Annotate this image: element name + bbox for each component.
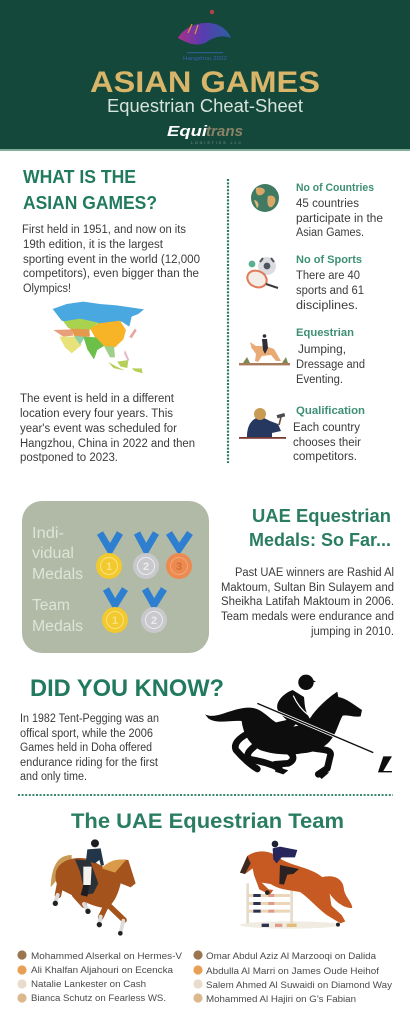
- label: team medals: Medals: [32, 618, 83, 635]
- panel: medals: [22, 501, 209, 653]
- fact: equestrian: Dressage and: [296, 359, 365, 371]
- text block: location: year's event was scheduled for: [20, 423, 177, 435]
- label: individual medals: vidual: [32, 545, 74, 562]
- legend: rider list, left: [17, 950, 183, 1004]
- text block: tent pegging: and only time.: [20, 771, 87, 783]
- text block: intro: Olympics!: [23, 283, 71, 295]
- rider: Omar Abdul Aziz Al Marzooqi: Omar Abdul Aziz Al Marzooqi on Dalida: [206, 951, 377, 962]
- fact: equestrian: Jumping,: [298, 344, 346, 356]
- text block: intro: First held in 1951, and now on its: [22, 224, 186, 236]
- legend: rider list, right: [193, 950, 392, 1005]
- logo: Equitrans: LOGISTICS LLC: [191, 141, 241, 145]
- fact: qualification: Qualification: [296, 405, 365, 417]
- heading: ASIAN GAMES?: [23, 193, 157, 213]
- rider: Bianca Schutz: Bianca Schutz on Fearless WS.: [31, 993, 166, 1004]
- label: individual medals: Indi-: [32, 525, 64, 542]
- text block: intro: sporting event in the world (12,000: [23, 254, 200, 266]
- icon: Hangzhou 2022 games logo: [178, 10, 231, 62]
- icon: show jumping horse and rider: [240, 841, 352, 929]
- logo: Equitrans: Equi: [167, 123, 208, 140]
- text block: location: The event is held in a different: [20, 393, 175, 405]
- text block: location: Hangzhou, China in 2022 and then: [20, 438, 195, 450]
- header banner: [0, 0, 410, 151]
- heading: DID YOU KNOW?: [30, 675, 224, 702]
- rider: Natalie Lankester: Natalie Lankester on Cash: [31, 979, 146, 990]
- text block: intro: [22, 224, 200, 295]
- icon: map of Asia: [53, 302, 144, 373]
- rider: Mohammed Alserkal: Mohammed Alserkal on Hermes-V: [31, 951, 183, 962]
- fact: countries: No of Countries: [296, 182, 374, 194]
- text block: location: [20, 393, 195, 464]
- logo: Equitrans: [167, 123, 243, 145]
- panel: did you know: [20, 675, 392, 783]
- text block: past winners: Team medals were endurance and: [221, 611, 394, 623]
- heading: The UAE Equestrian Team: [71, 810, 344, 833]
- fact: sports: [296, 254, 364, 312]
- text block: intro: 19th edition, it is the largest: [23, 239, 164, 251]
- fact: countries: Asian Games.: [296, 227, 364, 239]
- icon: gold medal team: [102, 589, 128, 633]
- fact: equestrian: Equestrian: [296, 327, 354, 339]
- icon: silver medal individual: 2: [143, 561, 149, 573]
- text block: past winners: jumping in 2010.: [310, 626, 394, 638]
- fact: equestrian: [296, 327, 365, 386]
- fact: sports: There are 40: [296, 270, 360, 282]
- text block: past winners: Past UAE winners are Rashid Al: [235, 567, 394, 579]
- icon: gold medal individual: 1: [106, 561, 112, 573]
- fact: qualification: [293, 405, 365, 463]
- rider: Salem Ahmed Al Suwaidi: Salem Ahmed Al Suwaidi on Diamond Way: [206, 980, 392, 991]
- heading: WHAT IS THE: [23, 167, 136, 187]
- rider: Abdulla Al Marri: Abdulla Al Marri on James Oude Heihof: [206, 966, 379, 977]
- text block: past winners: Sheikha Latifah Maktoum in 2006.: [221, 596, 394, 608]
- icon: tent-pegging horse and rider: [205, 675, 392, 779]
- heading: Medals: So Far...: [249, 529, 391, 550]
- fact: countries: [296, 182, 383, 239]
- subtitle: Equestrian Cheat-Sheet: [107, 96, 303, 116]
- label: team medals: Team: [32, 597, 70, 614]
- fact: equestrian: Eventing.: [296, 374, 343, 386]
- panel: UAE medals text: [221, 505, 394, 638]
- text block: intro: competitors), even bigger than the: [23, 268, 199, 280]
- icon: silver medal team: 2: [151, 615, 157, 627]
- icon: ball and racket: [245, 257, 278, 290]
- fact: sports: disciplines.: [296, 300, 358, 312]
- label: individual medals: [32, 525, 83, 583]
- title: ASIAN GAMES: [90, 66, 320, 99]
- icon: bronze medal individual: 3: [176, 561, 182, 573]
- icon: dressage rider: [239, 334, 290, 365]
- icon: gold medal individual: [96, 533, 122, 579]
- fact: qualification: Each country: [293, 422, 360, 434]
- panel: what is the Asian Games: [20, 167, 200, 464]
- fact: countries: 45 countries: [296, 198, 359, 210]
- text block: past winners: [221, 567, 394, 638]
- icon: Hangzhou 2022 games logo: Hangzhou 2022: [183, 56, 227, 62]
- heading: UAE Equestrian: [252, 505, 391, 526]
- heading: [249, 505, 391, 550]
- text block: tent pegging: endurance riding for the first: [20, 757, 159, 769]
- icon: silver medal team: [141, 589, 167, 633]
- icon: judge with gavel: [239, 408, 286, 439]
- panel: key facts: [239, 182, 383, 463]
- icon: gold medal team: 1: [112, 615, 118, 627]
- text block: past winners: Maktoum, Sultan Bin Sulayem and: [221, 582, 394, 594]
- text block: tent pegging: [20, 713, 159, 783]
- rider: Mohammed Al Hajiri: Mohammed Al Hajiri on G's Fabian: [206, 994, 356, 1005]
- text block: location: location every four years. This: [20, 408, 173, 420]
- icon: silver medal individual: [133, 533, 159, 579]
- icon: globe: [251, 184, 279, 212]
- label: team medals: [32, 597, 83, 635]
- heading: [23, 167, 157, 213]
- text block: tent pegging: In 1982 Tent-Pegging was an: [20, 713, 159, 725]
- text block: tent pegging: Games held in Doha offered: [20, 742, 152, 754]
- fact: sports: sports and 61: [296, 285, 364, 297]
- fact: qualification: competitors.: [293, 451, 357, 463]
- logo: Equitrans: trans: [206, 123, 243, 140]
- label: individual medals: Medals: [32, 566, 83, 583]
- fact: qualification: chooses their: [293, 437, 361, 449]
- fact: sports: No of Sports: [296, 254, 362, 266]
- text block: tent pegging: offical sport, while the 2006: [20, 728, 153, 740]
- icon: bronze medal individual: [166, 533, 192, 579]
- icon: horse and rider, left: [51, 839, 136, 936]
- fact: countries: participate in the: [296, 213, 383, 225]
- rider: Ali Khalfan Aljahouri: Ali Khalfan Aljahouri on Ecencka: [31, 965, 174, 976]
- text block: location: postponed to 2023.: [20, 452, 118, 464]
- panel: UAE equestrian team: [17, 810, 392, 1005]
